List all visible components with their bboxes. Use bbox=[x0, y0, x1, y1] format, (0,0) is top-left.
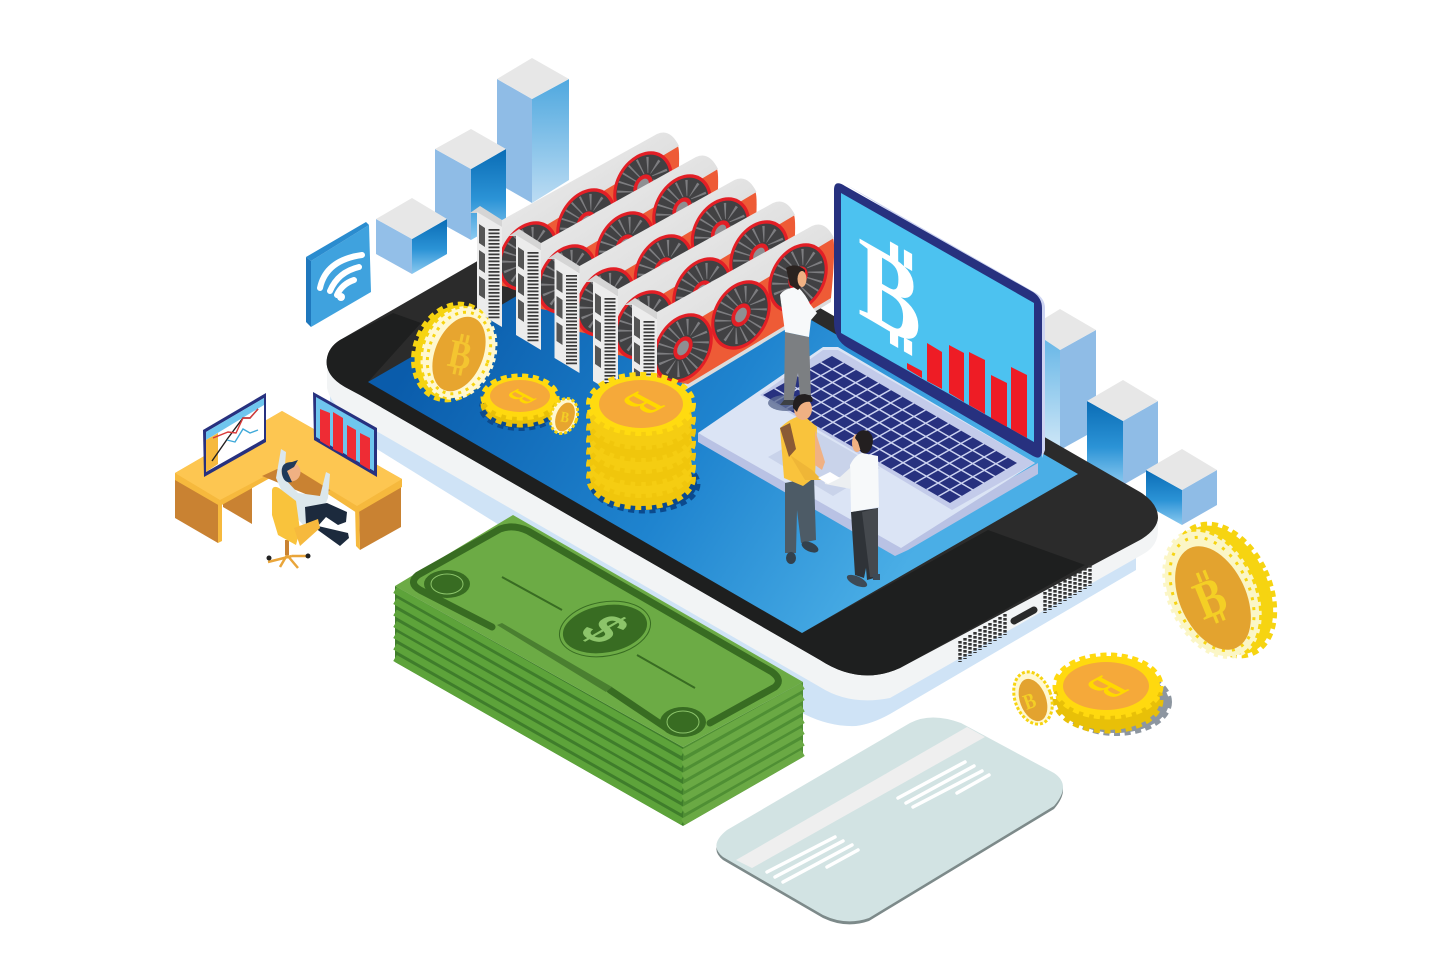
trader in chair bbox=[266, 449, 349, 568]
icon: wifi tile bbox=[306, 222, 371, 327]
smartphone bbox=[327, 186, 1158, 726]
magnetic stripe bbox=[736, 727, 985, 868]
laptop trackpad bbox=[768, 431, 880, 496]
dollar seal: $ bbox=[565, 607, 644, 652]
coin: flat right: B bbox=[1074, 670, 1140, 705]
desk left leg bbox=[175, 477, 222, 543]
left bar: tall bbox=[497, 58, 569, 203]
coin: flat small bbox=[482, 377, 558, 428]
charging port bbox=[1014, 610, 1034, 621]
speaker grille right bbox=[1045, 565, 1090, 613]
coin: tiny upright bbox=[546, 395, 582, 437]
left bar: small bbox=[376, 198, 447, 274]
banknote frame bbox=[413, 527, 778, 727]
desk top bbox=[175, 411, 402, 513]
coin: tiny upright: B bbox=[559, 410, 570, 427]
laptop keyboard bbox=[763, 356, 1017, 503]
person: man in yellow shirt bbox=[780, 394, 825, 564]
person: man in white shirt bbox=[818, 430, 880, 590]
coin stack bbox=[590, 376, 697, 510]
phone body bbox=[327, 300, 1158, 700]
phone shadow bbox=[330, 260, 1136, 726]
banknote corner seals bbox=[424, 570, 706, 737]
red bar chart on laptop bbox=[907, 343, 1027, 438]
card text lines left bbox=[767, 837, 858, 882]
coin stack: B bbox=[610, 386, 676, 421]
desk right leg bbox=[355, 487, 401, 550]
desk back panel bbox=[223, 485, 252, 524]
bitcoin symbol on laptop: B bbox=[858, 211, 921, 375]
coin: flat small: B bbox=[499, 385, 544, 409]
speaker grille left bbox=[960, 614, 1005, 662]
right bar: tall bbox=[1042, 309, 1096, 450]
laptop screen frame bbox=[845, 184, 1045, 458]
card text lines right bbox=[898, 762, 989, 807]
person: woman standing by the cards bbox=[768, 265, 817, 411]
dollar seal bbox=[555, 594, 655, 664]
left bar: medium bbox=[435, 129, 506, 240]
bill stack sides bbox=[395, 586, 803, 826]
phone screen bbox=[368, 223, 1078, 633]
coin: upright left: B bbox=[444, 332, 476, 380]
coin: small upright right bbox=[1007, 666, 1059, 730]
monitor with line chart bbox=[203, 393, 266, 477]
laptop display bbox=[841, 193, 1034, 442]
right bar: medium bbox=[1087, 380, 1158, 485]
laptop base bbox=[698, 433, 1038, 556]
office desk with trader bbox=[175, 392, 402, 568]
coin: upright left bbox=[402, 294, 508, 410]
top banknote bbox=[395, 515, 803, 747]
coin: small upright right: B bbox=[1020, 688, 1039, 715]
graphics cards row bbox=[470, 132, 840, 419]
phone bezel bbox=[327, 186, 1158, 675]
monitor with bar chart bbox=[313, 392, 377, 477]
coin: large upright right: B bbox=[1185, 564, 1235, 631]
laptop bbox=[698, 183, 1045, 556]
right bar: small bbox=[1146, 449, 1217, 525]
stack of dollar bills bbox=[395, 515, 803, 826]
bank card bbox=[716, 718, 1063, 924]
coin: large upright right bbox=[1146, 510, 1293, 672]
banknote lines bbox=[502, 577, 695, 688]
coin: flat right bbox=[1056, 656, 1169, 733]
